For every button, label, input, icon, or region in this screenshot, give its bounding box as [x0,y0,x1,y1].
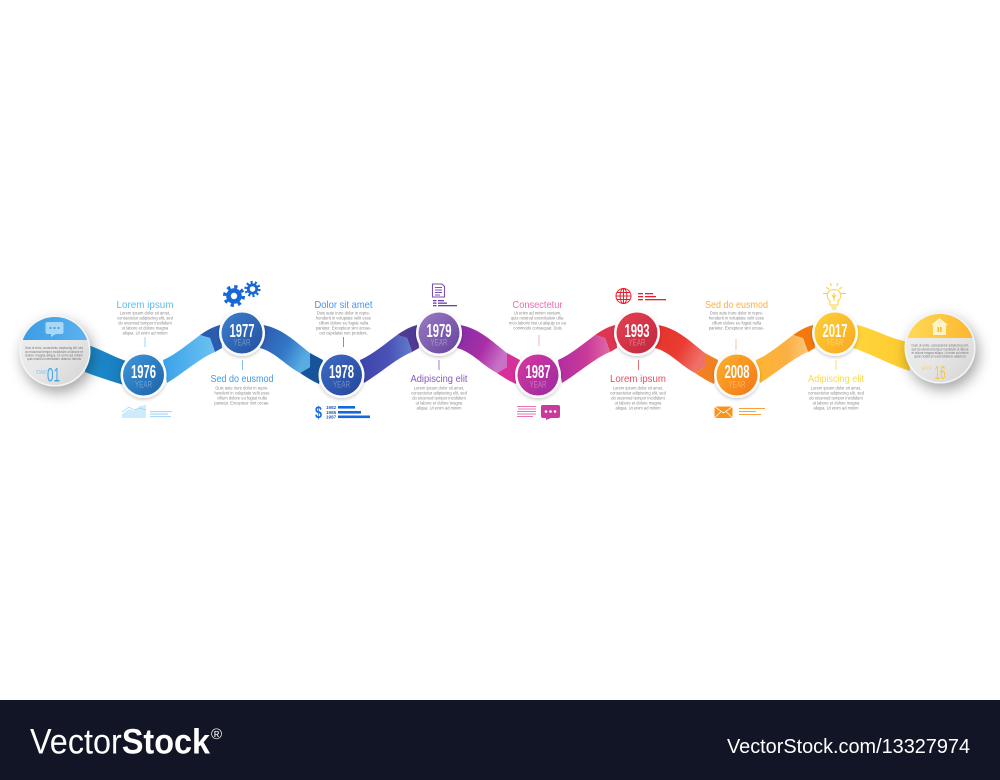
text block: Dolor sit amet (1978) [314,299,373,347]
text block: Adipiscing elit (2017): aliqua. Ut enim ad minim [813,406,859,410]
icon: house [931,318,948,335]
start circle text: dolore magna aliqua. Ut enim ad minim [25,352,84,358]
node: 1978: YEAR [333,380,350,390]
text block: Adipiscing elit (2017) [808,360,865,410]
ribbon segment: 1993 to 2008 [655,325,718,384]
text block: Lorem ipsum (1976): ut labore et dolore magna [122,326,169,330]
text block: Lorem ipsum (1993): aliqua. Ut enim ad minim [615,406,661,410]
node: 1993 [614,310,660,356]
text block: Sed do eusmod (2008): cillum dolore eu fugiat nulla [712,320,762,326]
node: 1977 [219,310,265,356]
node: 1978: 1978 [329,362,354,382]
text block: Lorem ipsum (1976): Lorem ipsum dolor sit amet, [120,310,170,316]
start circle text: Duis ut enim, consectetur adipiscing elit, sed [25,345,83,350]
node: 1993: 1993 [624,321,650,341]
text block: Lorem ipsum (1993): Lorem ipsum [610,373,666,385]
text block: Adipiscing elit (1979): Lorem ipsum dolor sit amet, [414,386,464,390]
text block: Lorem ipsum (1993) [610,360,667,410]
node: 1979: YEAR [430,338,448,348]
text block: Dolor sit amet (1978): pariatur. Excepteur sint occae- [316,326,372,330]
ribbon segment: 1978 to 1979 [360,325,419,383]
text block: Adipiscing elit (2017): ut labore et dolore magna [813,400,860,406]
text block: Consectetur (1987): Ut enim ad minim veniam, [514,310,561,316]
image id: VectorStock.com/13327974 [727,736,970,758]
text block: Dolor sit amet (1978): henderit in voluptate velit esse [316,316,372,320]
text block: Lorem ipsum (1993): Lorem ipsum dolor sit amet, [613,386,663,390]
text block: Adipiscing elit (1979): Adipiscing elit [410,373,468,385]
start circle text [25,345,84,361]
icon: document with bars [432,284,457,306]
node: 2017: YEAR [826,338,844,348]
node: 2017 [812,310,858,356]
end circle text: et dolore magna aliqua. Ut enim ad minim [912,350,969,355]
end circle text [912,342,969,358]
node: 1979: 1979 [426,321,452,341]
icon: dollar with bars: 1985 [326,410,337,415]
start label [36,366,60,386]
end label [922,363,946,383]
text block: Consectetur (1987): mco laboris nisi ut aliquip ex ea [509,320,567,326]
wavy ribbon [85,325,910,385]
icon: globe with bars [616,288,666,304]
text block: Sed do eusmod (2008) [705,299,768,350]
text block: Sed do eusmod (1977) [210,360,274,406]
text block: Dolor sit amet (1978): cillum dolore eu fugiat nulla [319,320,369,326]
text block: Dolor sit amet (1978): Duis aute irure dolor in repre- [317,310,371,316]
text block: Lorem ipsum (1993): ut labore et dolore magna [615,400,662,406]
text block: Lorem ipsum (1976): consectetur adipiscing elit, sed [117,316,174,320]
text block: Sed do eusmod (2008): henderit in voluptate velit esse [709,316,765,320]
text block: Sed do eusmod (1977): cillum dolore eu fugiat nulla [217,396,268,400]
text block: Consectetur (1987): quis nostrud exercitation ulla- [511,316,565,320]
text block: Sed do eusmod (1977): pariatur. Excepteur sint occae- [214,400,270,406]
ribbon segment: 1987 to 1993 [558,325,617,383]
start label: 01 [47,366,60,386]
text block: Consectetur (1987): Consectetur [512,299,563,311]
text block: Sed do eusmod (2008): Duis aute irure dolor in repre- [710,310,764,316]
text block: Lorem ipsum (1976): do eiusmod tempor incididunt [118,320,173,326]
node: 1978 [318,352,364,398]
start circle text: quis nostrud exercitation ullamco laboris [27,356,81,361]
text block: Lorem ipsum (1976): aliqua. Ut enim ad minim [122,330,168,336]
text block: Adipiscing elit (2017): do eiusmod tempor incididunt [809,396,864,400]
icon: dollar with bars: 1982 [326,405,337,410]
start circle [20,316,90,386]
text block: Consectetur (1987): commodo consequat. Duis [513,326,562,330]
icon: area chart with legend [122,405,172,418]
icon: dollar with bars [315,403,370,422]
icon: gears [225,282,259,305]
text block: Lorem ipsum (1976): Lorem ipsum [116,299,174,311]
text block: Sed do eusmod (1977): henderit in voluptate velit esse [214,390,270,396]
ribbon segment: 2008 to 2017 [756,325,815,383]
node: 1977: YEAR [234,338,251,348]
text block: Adipiscing elit (1979): aliqua. Ut enim ad minim [416,406,462,410]
text block: Sed do eusmod (1977): Duis aute irure dolor in repre- [215,386,269,390]
node: 1987 [515,352,561,398]
node: 1976 [120,352,166,398]
text block: Adipiscing elit (1979) [410,360,468,410]
icon: envelope with text [714,406,765,418]
text block: Lorem ipsum (1993): consectetur adipiscing elit, sed [610,390,667,396]
text block: Adipiscing elit (1979): do eiusmod tempor incididunt [412,396,467,400]
node: 2008: YEAR [728,380,746,390]
node: 1987: YEAR [530,380,547,390]
logo: VectorStock: VectorStock [30,722,210,762]
node: 2008: 2008 [724,362,750,382]
end label: 16 [934,363,946,383]
start label: START [36,370,47,376]
icon: pink text lines and chat bubble [517,405,560,420]
text block: Adipiscing elit (2017): consectetur adipiscing elit, sed [808,390,865,396]
text block: Dolor sit amet (1978): Dolor sit amet [314,299,373,311]
text block: Sed do eusmod (1977): Sed do eusmod [210,373,274,385]
ribbon segment: 2017 to end [853,325,910,371]
node: 1977: 1977 [230,321,254,341]
ribbon segment: 1977 to 1978 [260,325,323,384]
ribbon segment: 1976 to 1977 [163,325,222,383]
ribbon segment: 1979 to 1987 [457,325,520,384]
ribbon segment: start to 1976 [85,345,126,385]
icon: chat bubble [46,322,64,337]
node: 1979 [416,310,462,356]
end circle text: quis nostrud exercitation ullamco [914,354,967,358]
text block: Adipiscing elit (1979): consectetur adipiscing elit, sed [411,390,468,396]
text block: Adipiscing elit (2017): Adipiscing elit [808,373,864,385]
footer bar [0,700,1000,780]
text block: Consectetur (1987) [509,299,567,346]
end circle text: sed do eiusmod tempor incididunt ut labore [912,346,969,352]
text block: Dolor sit amet (1978): cat cupidatat non proident, [319,330,368,336]
registered mark: ® [211,726,222,743]
end label: END [922,366,932,372]
node: 2008 [714,352,760,398]
icon: light bulb [823,283,846,309]
text block: Sed do eusmod (2008): Sed do eusmod [705,299,768,311]
end circle text: Duis ut enim, consectetur adipiscing elit, [912,342,968,348]
icon: dollar with bars: 1987 [326,414,337,420]
node: 1976: YEAR [135,380,152,390]
text block: Lorem ipsum (1993): do eiusmod tempor incididunt [611,396,666,400]
text block: Adipiscing elit (2017): Lorem ipsum dolor sit amet, [811,386,861,390]
start circle text: do eiusmod tempor incididunt ut labore et [25,349,84,354]
node: 1976: 1976 [131,362,156,382]
icon: dollar with bars: $ [315,403,322,422]
node: 1987: 1987 [526,362,550,382]
node: 2017: 2017 [822,321,848,341]
end circle [904,312,976,384]
text block: Sed do eusmod (2008): pariatur. Excepteur sint occae- [709,326,765,330]
node: 1993: YEAR [628,338,646,348]
text block: Adipiscing elit (1979): ut labore et dolore magna [416,400,463,406]
text block: Lorem ipsum (1976) [116,299,174,347]
